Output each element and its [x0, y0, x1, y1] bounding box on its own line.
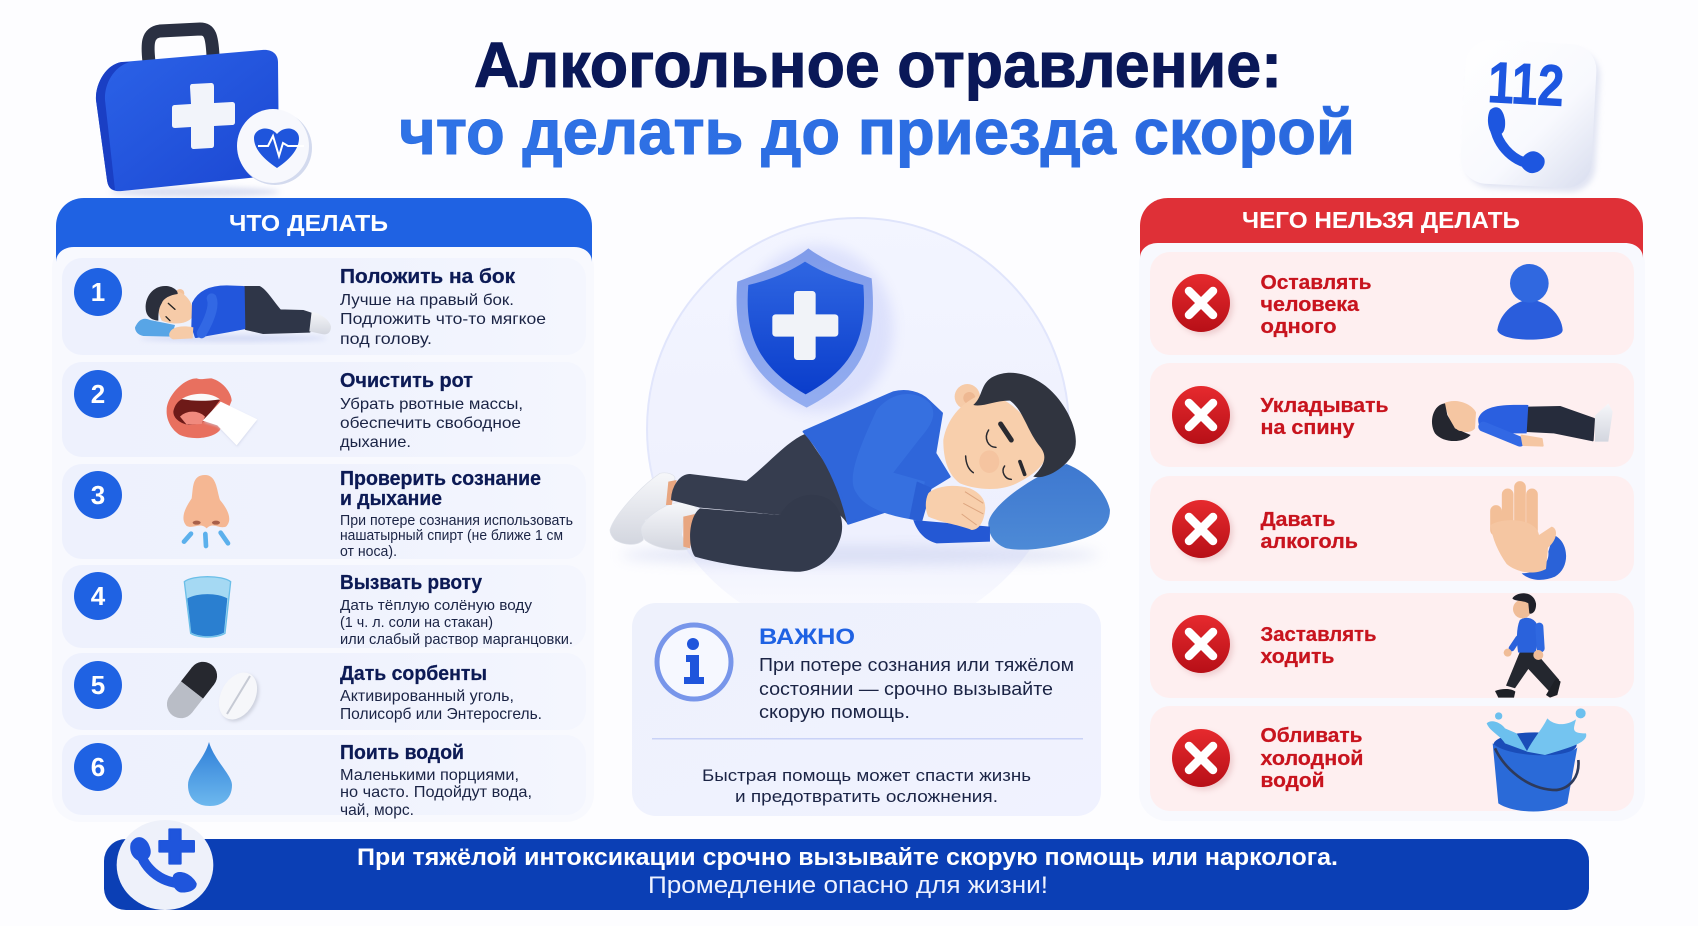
- row: do not force walking: ходить: [1260, 646, 1334, 668]
- hair: [973, 373, 1076, 477]
- header: what to do: [56, 198, 592, 290]
- row: do not douse with cold water: холодной: [1260, 748, 1364, 770]
- header: what not to do: ЧЕГО НЕЛЬЗЯ ДЕЛАТЬ: [1242, 207, 1520, 233]
- row 5: sorbents: Активированный уголь,: [340, 688, 514, 705]
- icon: bucket with splash: [1487, 708, 1586, 811]
- ear: [955, 384, 980, 409]
- row: do not give alcohol: [1150, 476, 1634, 581]
- shoes: [610, 473, 675, 544]
- row: do not lay on back: Укладывать: [1260, 395, 1388, 417]
- row: do not douse with cold water: [1150, 706, 1634, 811]
- row 2: clear mouth: дыхание.: [340, 434, 411, 451]
- row 1: on side: Подложить что-то мягкое: [340, 311, 546, 328]
- icon: sleeping person small: [135, 286, 331, 342]
- row 1: on side: Положить на бок: [340, 266, 516, 288]
- row 4: induce vomiting: Дать тёплую солёную воду: [340, 598, 533, 614]
- row: do not leave alone: Оставлять: [1260, 272, 1372, 294]
- icon: glass of water: [184, 577, 231, 637]
- row: do not give alcohol: Давать: [1260, 509, 1336, 531]
- row 6: water: 6: [91, 752, 105, 782]
- row 6: water: чай, морс.: [340, 802, 414, 819]
- title: Алкогольное отравление:: [474, 29, 1282, 101]
- title: что делать до приезда скорой: [399, 96, 1355, 168]
- row 3: check consciousness: 3: [91, 480, 105, 510]
- bottom banner: При тяжёлой интоксикации срочно вызывайте скорую помощь или нарколога.: [357, 844, 1338, 871]
- pillow: [988, 464, 1110, 550]
- ankles: [666, 480, 677, 505]
- row: do not force walking: Заставлять: [1260, 624, 1376, 646]
- label: 112: 112: [1486, 50, 1566, 119]
- row: do not lay on back: [1150, 363, 1634, 467]
- panel: important note: состоянии — срочно вызывайте: [759, 679, 1053, 699]
- icon: handset: [1488, 107, 1545, 173]
- row: do not leave alone: одного: [1260, 316, 1336, 338]
- icon: info: [657, 625, 731, 699]
- row: do not force walking: [1150, 593, 1634, 698]
- icon: lone person silhouette: [1497, 264, 1563, 340]
- icon: person on back: [1432, 401, 1613, 446]
- row 2: clear mouth: Очистить рот: [340, 370, 473, 392]
- panel: what not to do: [1139, 198, 1645, 821]
- icon: first aid kit: [96, 29, 312, 197]
- central circle backdrop: [647, 218, 1069, 640]
- row 1: on side: под голову.: [340, 331, 432, 348]
- row 1: on side: [62, 258, 586, 355]
- row: do not leave alone: человека: [1260, 294, 1360, 316]
- row 6: water: но часто. Подойдут вода,: [340, 784, 532, 801]
- row 3: check consciousness: При потере сознания использовать: [340, 513, 573, 529]
- icon: mouth with tissue: [167, 378, 257, 447]
- bottom banner: Промедление опасно для жизни!: [648, 872, 1048, 899]
- row 3: check consciousness: Проверить сознание: [340, 468, 541, 490]
- under sleeve: [913, 520, 990, 543]
- row 5: sorbents: 5: [91, 670, 105, 700]
- head: [943, 395, 1047, 489]
- row 2: clear mouth: обеспечить свободное: [340, 415, 521, 432]
- hand: [926, 486, 985, 530]
- row 4: induce vomiting: (1 ч. л. соли на стакан): [340, 615, 493, 631]
- icon: call with plus: [117, 820, 213, 910]
- icon: 112 phone tile: [1459, 39, 1601, 193]
- row: do not douse with cold water: водой: [1260, 770, 1324, 792]
- row 4: induce vomiting: или слабый раствор марганцовки.: [340, 632, 573, 648]
- row 3: check consciousness: [62, 464, 586, 560]
- row 6: water: Поить водой: [340, 742, 464, 764]
- panel: important note: Быстрая помощь может спасти жизнь: [702, 766, 1031, 785]
- face features: [1001, 424, 1011, 440]
- panel: important note: и предотвратить осложнения.: [735, 787, 998, 806]
- row 5: sorbents: Дать сорбенты: [340, 663, 487, 685]
- row: do not lay on back: на спину: [1260, 417, 1355, 439]
- icon: nose: [183, 475, 229, 546]
- row 3: check consciousness: нашатырный спирт (не ближе 1 см: [340, 528, 563, 544]
- icon: stop hand: [1491, 487, 1566, 580]
- panel: what to do: [52, 198, 594, 822]
- row 4: induce vomiting: 4: [91, 581, 106, 611]
- row 6: water: [62, 735, 586, 819]
- row 2: clear mouth: 2: [91, 379, 105, 409]
- row 4: induce vomiting: Вызвать рвоту: [340, 572, 483, 594]
- icon: water drop: [188, 742, 232, 806]
- panel: important note: При потере сознания или тяжёлом: [759, 655, 1074, 675]
- title: [399, 29, 1355, 168]
- row 2: clear mouth: Убрать рвотные массы,: [340, 396, 523, 413]
- row: do not douse with cold water: Обливать: [1260, 725, 1362, 747]
- row 5: sorbents: Полисорб или Энтеросгель.: [340, 706, 542, 723]
- icon: shield with cross: [737, 245, 893, 412]
- row 2: clear mouth: [62, 362, 586, 457]
- panel: important note: скорую помощь.: [759, 702, 910, 722]
- row: do not leave alone: [1150, 252, 1634, 355]
- icon: walking person: [1495, 593, 1561, 698]
- panel: important note: [632, 603, 1101, 816]
- row 3: check consciousness: от носа).: [340, 544, 397, 560]
- icon: heart badge: [237, 109, 312, 185]
- row 6: water: Маленькими порциями,: [340, 767, 519, 784]
- bottom banner: [104, 820, 1589, 910]
- header: what not to do: [1140, 198, 1643, 290]
- legs: [672, 435, 848, 523]
- row 1: on side: Лучше на правый бок.: [340, 292, 514, 309]
- illustration: sleeping person in recovery position: [610, 373, 1110, 572]
- row 4: induce vomiting: [62, 565, 586, 648]
- header: what to do: ЧТО ДЕЛАТЬ: [229, 210, 388, 236]
- row 1: on side: 1: [91, 277, 105, 307]
- arm: [853, 394, 933, 520]
- row: do not give alcohol: алкоголь: [1260, 531, 1358, 553]
- torso: [804, 391, 949, 523]
- row 3: check consciousness: и дыхание: [340, 488, 442, 510]
- panel: important note: ВАЖНО: [759, 624, 855, 649]
- icon: pills: [161, 656, 267, 728]
- row 5: sorbents: [62, 653, 586, 730]
